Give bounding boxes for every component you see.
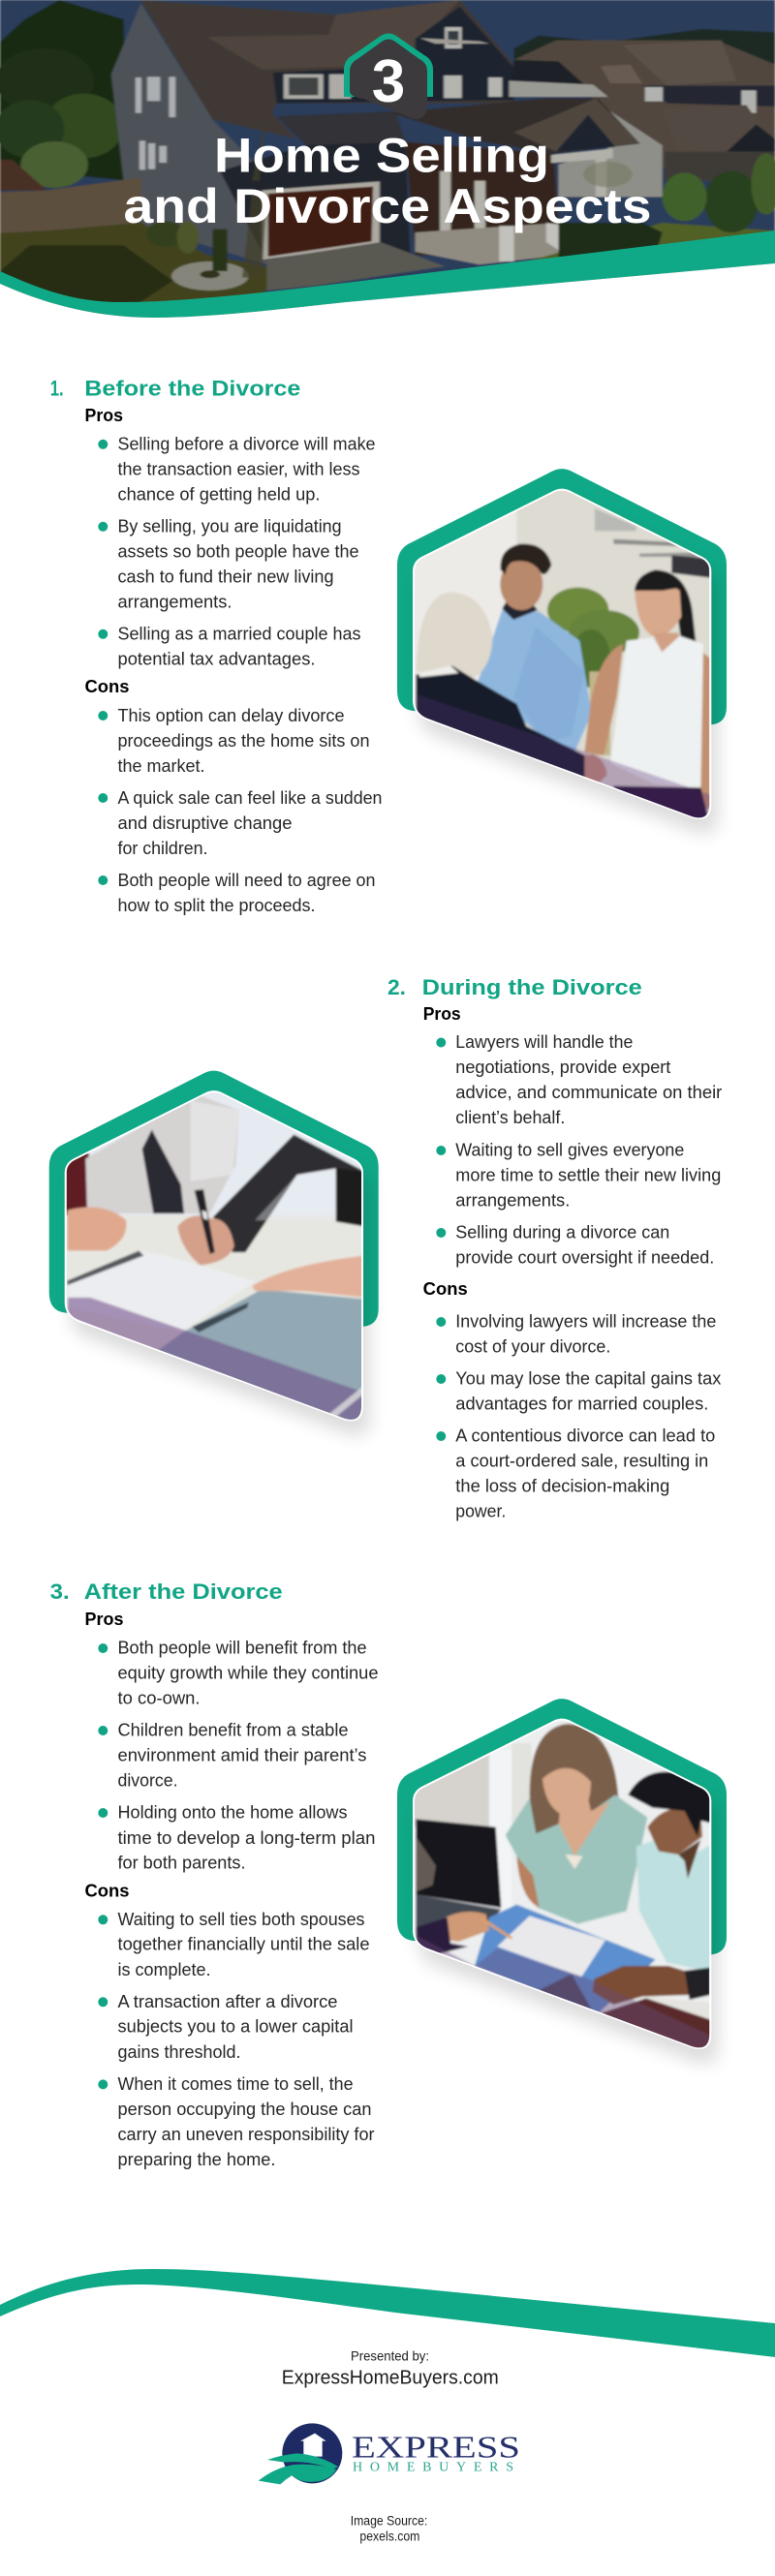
logo tagline: HOMEBUYERS	[353, 2461, 513, 2475]
cons list: subjects you to a lower capital	[118, 2016, 353, 2037]
cons list: advantages for married couples.	[455, 1394, 708, 1414]
pros list: to co-own.	[118, 1687, 200, 1708]
pros label: Pros	[85, 1610, 124, 1629]
heading: after the divorce: After the Divorce	[84, 1579, 283, 1604]
badge: number 3 hexagon	[344, 33, 433, 119]
pros list: the transaction easier, with less	[118, 458, 360, 478]
cons list: the market.	[118, 755, 205, 776]
pros list: Children benefit from a stable	[118, 1720, 349, 1740]
cons list: Both people will need to agree on	[118, 870, 376, 890]
section 3: after the divorce text	[50, 1579, 378, 2169]
pros list: more time to settle their new living	[455, 1165, 721, 1185]
photo: couple reviewing paperwork in hexagon frame	[397, 1699, 727, 2070]
header: teal wave	[0, 230, 775, 318]
pros list	[98, 1638, 379, 1873]
cons list: the loss of decision-making	[455, 1476, 669, 1496]
pros list: negotiations, provide expert	[455, 1057, 670, 1077]
cons list: Waiting to sell ties both spouses	[118, 1909, 364, 1929]
photo: signing document in hexagon frame	[49, 1071, 379, 1435]
cons list: proceedings as the home sits on	[118, 730, 370, 751]
cons list: carry an uneven responsibility for	[118, 2124, 374, 2144]
pros list: assets so both people have the	[118, 540, 358, 561]
logo icon	[259, 2423, 342, 2484]
heading: before the divorce: Before the Divorce	[84, 376, 300, 400]
pros list: Selling as a married couple has	[118, 624, 360, 643]
pros list: provide court oversight if needed.	[455, 1247, 714, 1268]
pros list: Waiting to sell gives everyone	[455, 1139, 684, 1160]
pros list: environment amid their parent’s	[118, 1744, 366, 1764]
footer: website: ExpressHomeBuyers.com	[282, 2368, 499, 2389]
pros list: chance of getting held up.	[118, 483, 320, 504]
heading: during the divorce: During the Divorce	[422, 975, 642, 999]
cons list: a court-ordered sale, resulting in	[455, 1451, 708, 1471]
pros list: arrangements.	[455, 1190, 570, 1211]
cons list: is complete.	[118, 1959, 211, 1979]
cons list: power.	[455, 1501, 506, 1521]
badge: number 3 hexagon: 3	[372, 48, 405, 115]
footer: image source: pexels.com	[359, 2530, 419, 2543]
cons list: This option can delay divorce	[118, 705, 345, 725]
heading: after the divorce: 3.	[50, 1579, 70, 1604]
cons list: A contentious divorce can lead to	[455, 1426, 715, 1446]
footer: presented by: Presented by:	[351, 2348, 429, 2364]
pros list: By selling, you are liquidating	[118, 515, 341, 536]
cons label: Cons	[85, 677, 130, 696]
cons list: When it comes time to sell, the	[118, 2073, 353, 2094]
title: Home Selling	[214, 128, 549, 182]
cons list	[98, 1909, 375, 2169]
logo wordmark: EXPRESS	[352, 2429, 520, 2464]
pros list: Selling before a divorce will make	[118, 433, 376, 453]
cons list: together financially until the sale	[118, 1934, 370, 1954]
pros list: client’s behalf.	[455, 1107, 565, 1127]
pros list: potential tax advantages.	[118, 649, 316, 668]
heading: before the divorce: 1.	[50, 376, 64, 400]
footer: image source: Image Source:	[351, 2514, 427, 2529]
pros list: divorce.	[118, 1770, 178, 1790]
pros list	[98, 433, 376, 668]
cons list: and disruptive change	[118, 813, 293, 833]
footer: image source	[351, 2514, 427, 2543]
pros list: Both people will benefit from the	[118, 1638, 366, 1658]
cons list: Involving lawyers will increase the	[455, 1311, 716, 1331]
cons list: person occupying the house can	[118, 2099, 372, 2119]
pros label: Pros	[85, 406, 123, 425]
cons label: Cons	[423, 1279, 468, 1299]
cons list: A quick sale can feel like a sudden	[118, 787, 382, 808]
cons list: preparing the home.	[118, 2149, 275, 2169]
cons list: You may lose the capital gains tax	[455, 1367, 722, 1389]
cons list	[98, 705, 383, 915]
pros list: Lawyers will handle the	[455, 1031, 633, 1052]
pros list: Selling during a divorce can	[455, 1222, 669, 1242]
cons list	[436, 1311, 722, 1521]
cons list: A transaction after a divorce	[118, 1991, 337, 2011]
pros list	[436, 1031, 722, 1268]
cons label: Cons	[85, 1881, 130, 1900]
pros list: arrangements.	[118, 591, 232, 612]
pros list: time to develop a long-term plan	[118, 1827, 376, 1848]
cons list: how to split the proceeds.	[118, 895, 316, 915]
cons list: gains threshold.	[118, 2041, 240, 2062]
photo: handshake with agent in hexagon frame	[397, 469, 727, 834]
logo: express homebuyers	[259, 2423, 520, 2484]
title	[124, 128, 651, 233]
pros list: equity growth while they continue	[118, 1662, 378, 1682]
pros list: for both parents.	[118, 1852, 246, 1873]
footer: teal wave	[0, 2269, 775, 2357]
heading: during the divorce: 2.	[388, 975, 406, 999]
pros list: cash to fund their new living	[118, 566, 333, 587]
pros list: advice, and communicate on their	[455, 1082, 722, 1102]
header: house photo background	[0, 0, 775, 322]
section 2: during the divorce text	[388, 975, 722, 1521]
title: and Divorce Aspects	[124, 179, 651, 233]
section 1: before the divorce text	[50, 376, 382, 915]
pros label: Pros	[423, 1004, 461, 1024]
pros list: Holding onto the home allows	[118, 1802, 347, 1823]
cons list: cost of your divorce.	[455, 1336, 610, 1357]
cons list: for children.	[118, 838, 207, 858]
